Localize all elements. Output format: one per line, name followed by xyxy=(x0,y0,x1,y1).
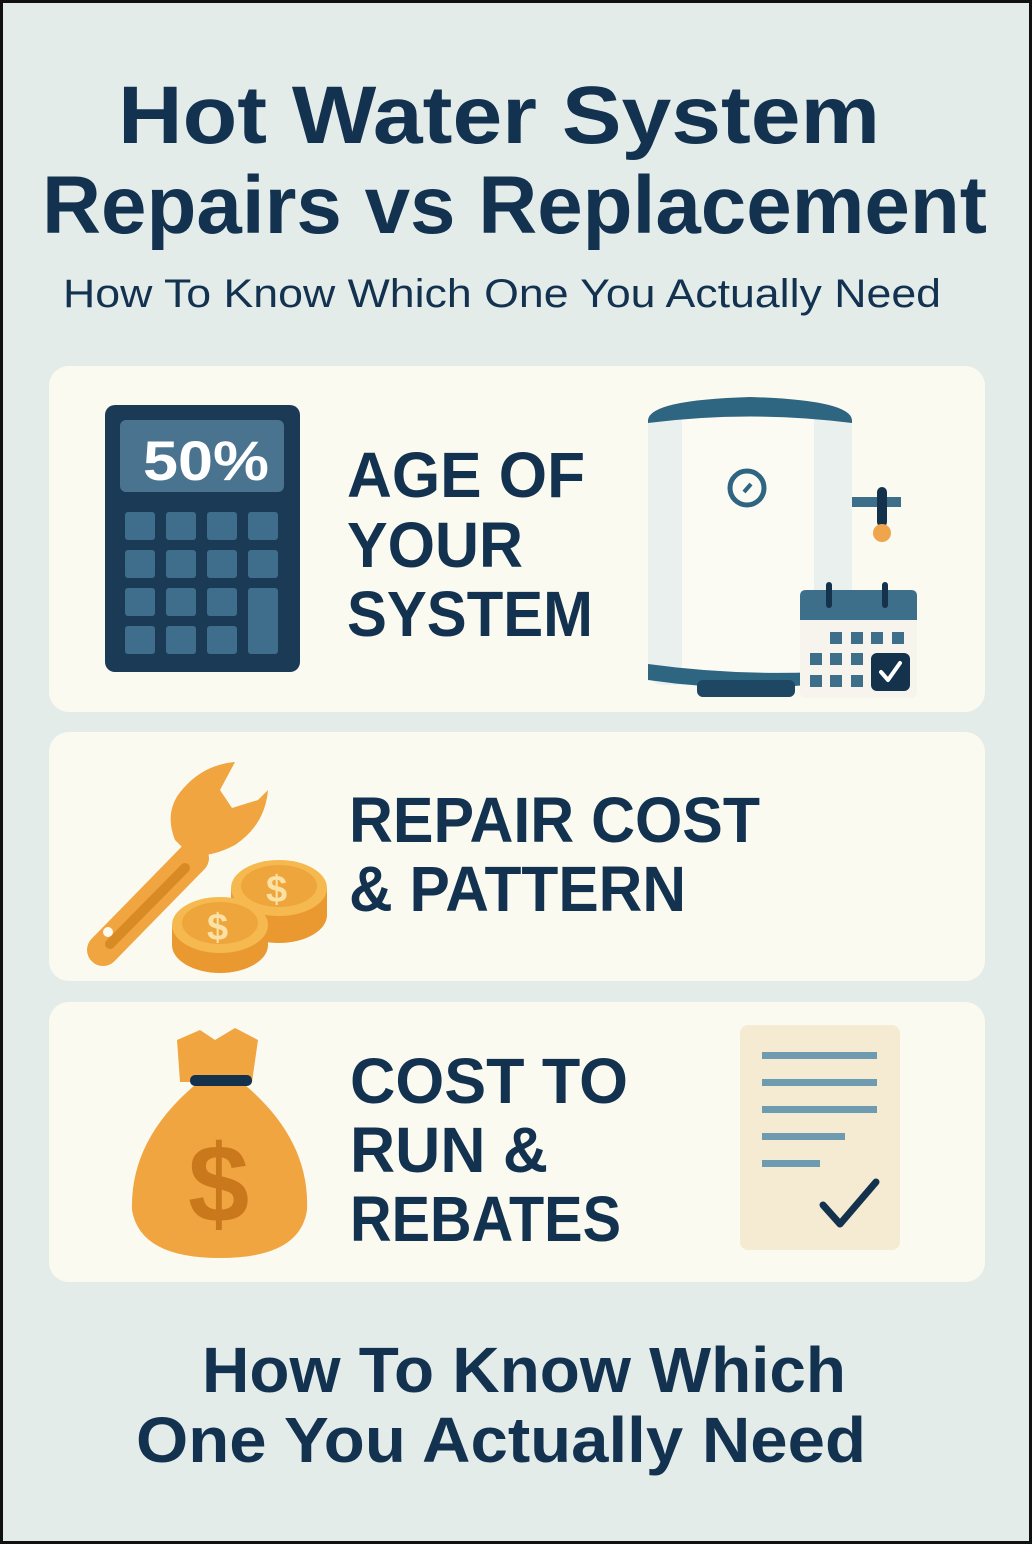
heading: repair cost & pattern: & PATTERN xyxy=(349,853,686,925)
icon: document with check xyxy=(740,1025,900,1250)
heading: age of your system: YOUR xyxy=(347,509,523,581)
heading: cost to run & rebates: REBATES xyxy=(350,1183,621,1255)
icon: calculator xyxy=(105,405,300,672)
footer text xyxy=(136,1334,866,1476)
icon: wrench and coins: $ xyxy=(266,869,287,911)
heading: repair cost & pattern xyxy=(349,784,760,925)
title: Hot Water System xyxy=(118,70,880,161)
panel: cost to run xyxy=(49,1002,985,1282)
panel: age of your system xyxy=(49,366,985,712)
heading: age of your system: AGE OF xyxy=(347,439,585,511)
icon: water heater with calendar xyxy=(648,397,917,698)
icon: money bag xyxy=(132,1028,307,1258)
title: Repairs vs Replacement xyxy=(42,160,987,251)
icon: money bag: $ xyxy=(188,1123,249,1246)
icon: wrench and coins: $ xyxy=(207,907,228,949)
heading: age of your system: SYSTEM xyxy=(347,578,593,650)
heading: repair cost & pattern: REPAIR COST xyxy=(349,784,760,856)
icon: wrench and coins xyxy=(103,762,327,973)
heading: cost to run & rebates xyxy=(350,1045,628,1255)
subtitle: How To Know Which One You Actually Need xyxy=(63,272,941,316)
panel: repair cost xyxy=(49,732,985,981)
heading: age of your system xyxy=(347,439,593,650)
icon: calculator: 50% xyxy=(143,429,269,492)
footer text: How To Know Which xyxy=(202,1334,846,1406)
footer text: One You Actually Need xyxy=(136,1404,866,1476)
heading: cost to run & rebates: COST TO xyxy=(350,1045,628,1117)
heading: cost to run & rebates: RUN & xyxy=(350,1114,548,1186)
title xyxy=(42,70,987,251)
